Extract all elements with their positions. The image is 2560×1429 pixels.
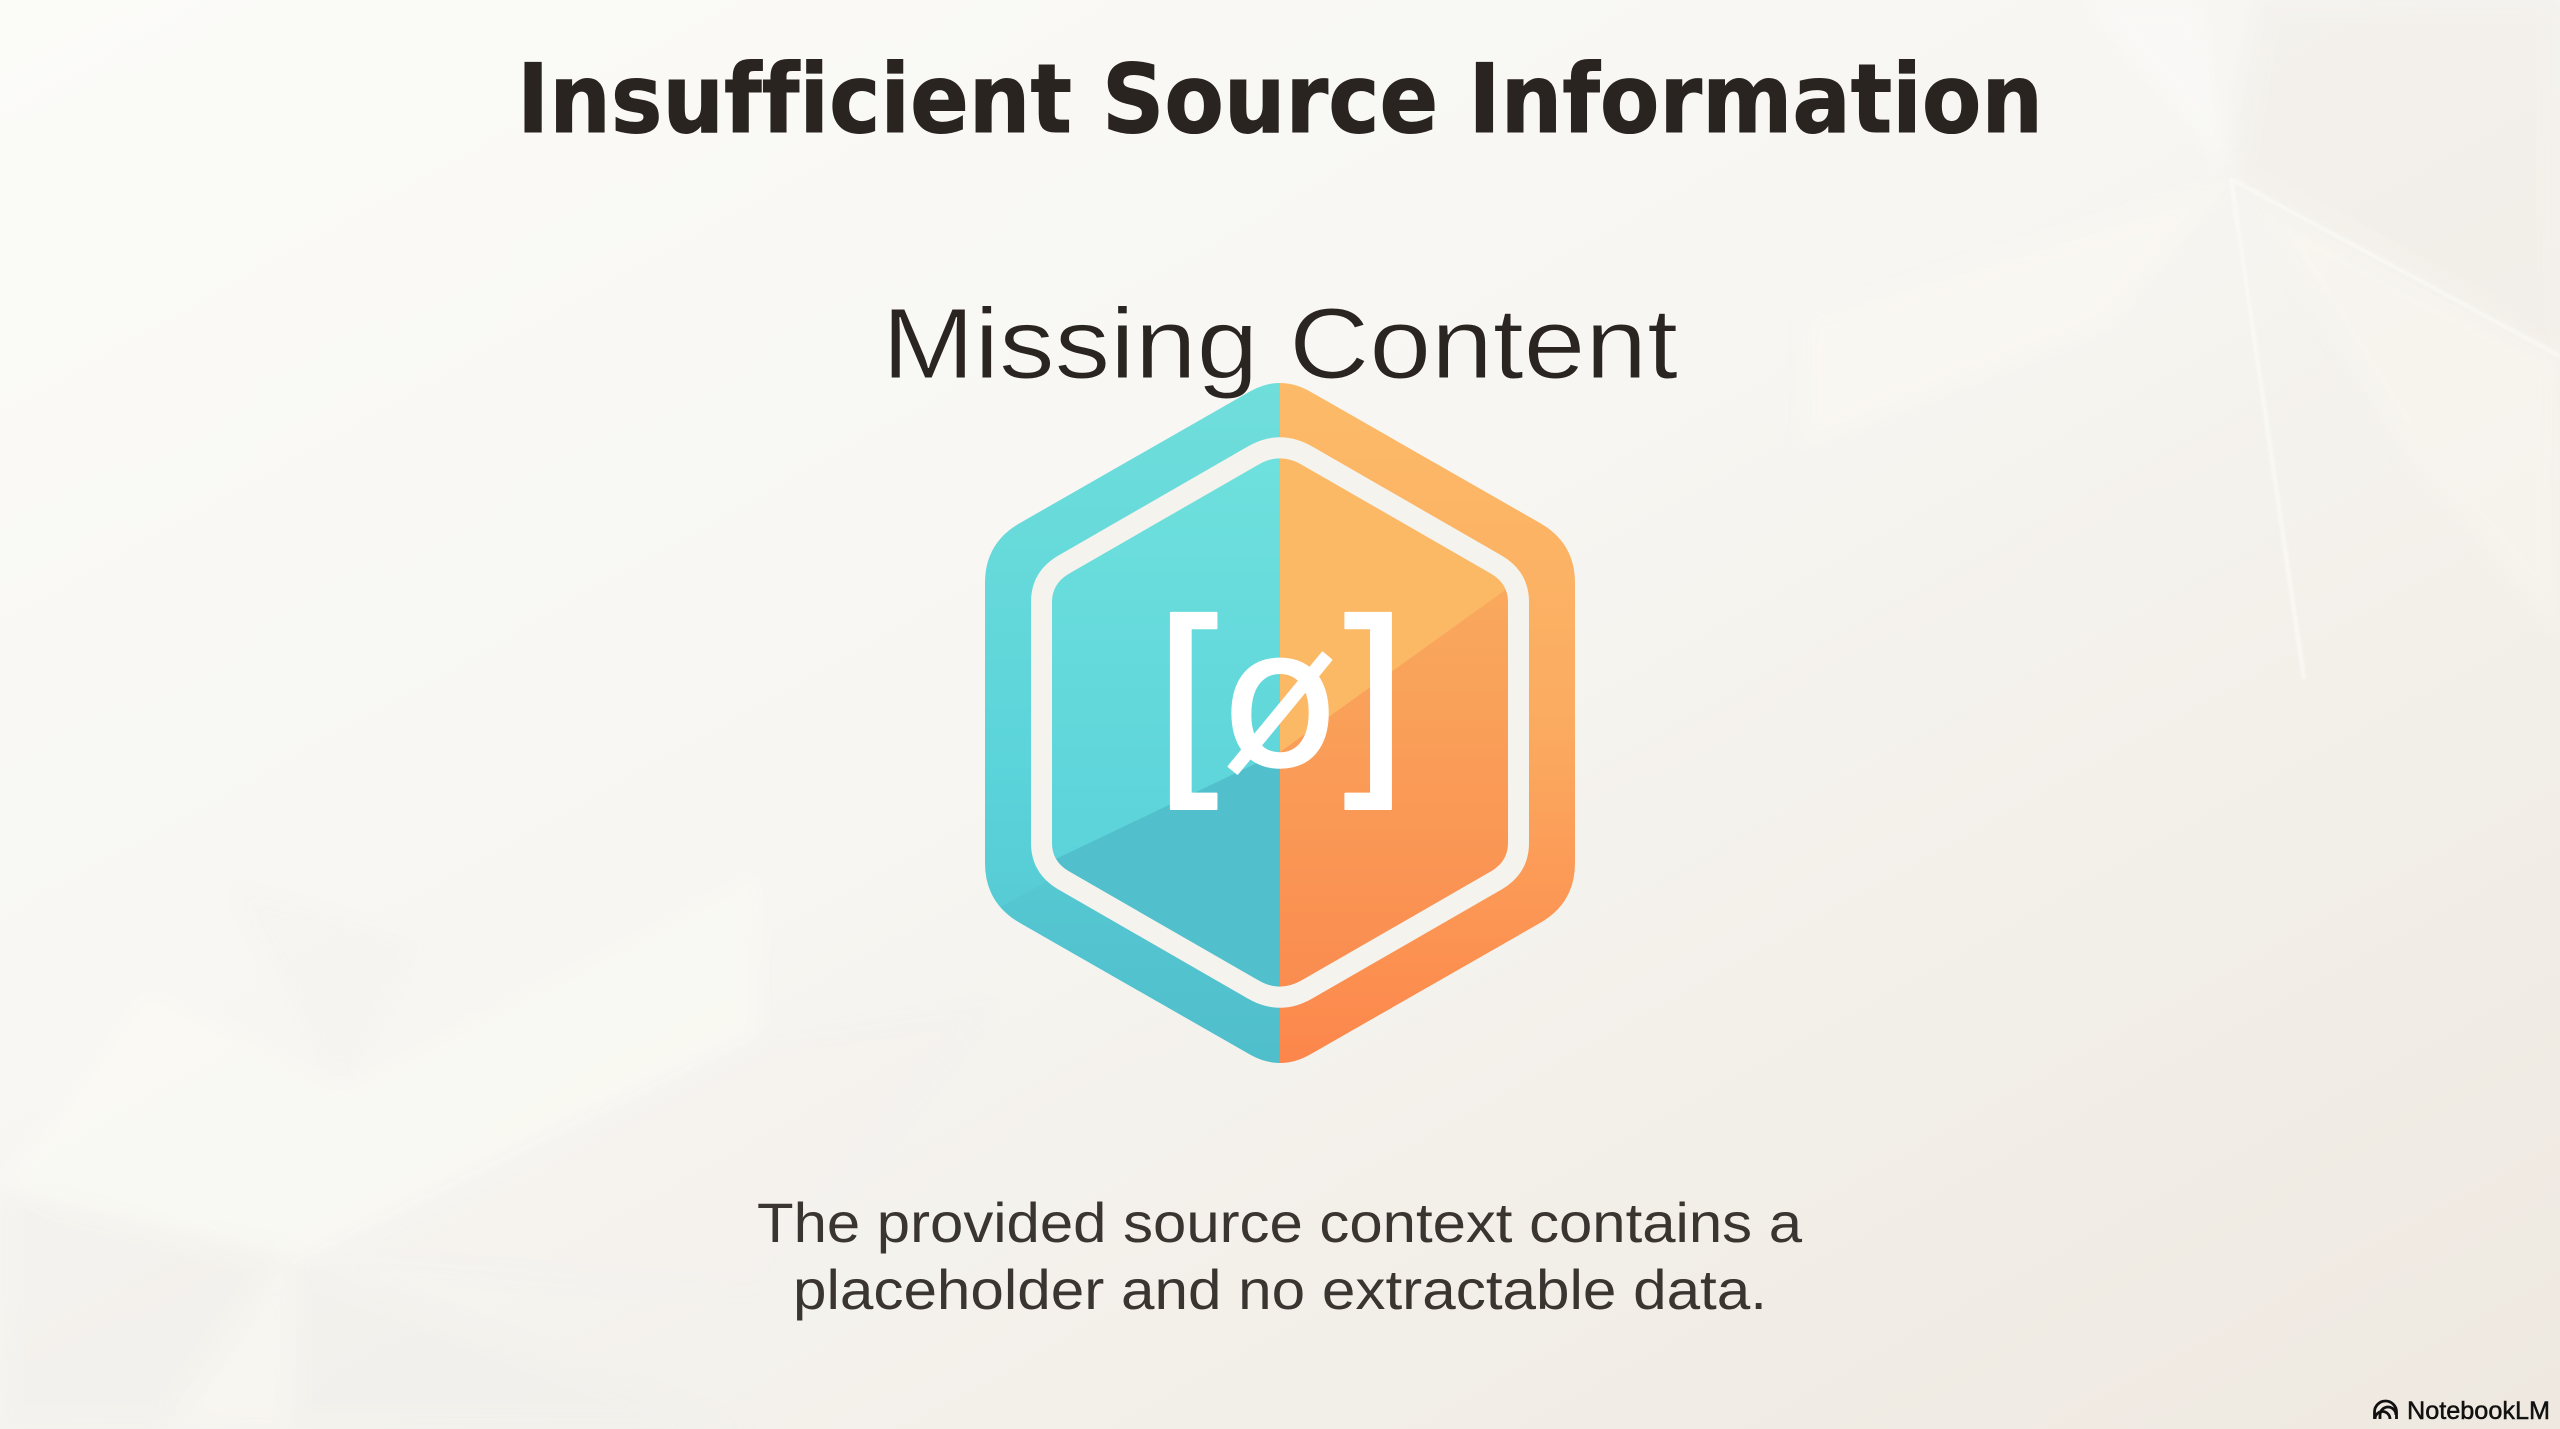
title: Insufficient Source Information: [517, 45, 2043, 155]
body text: placeholder and no extractable data.: [793, 1258, 1767, 1321]
symbol: bracketed empty set: [: [1152, 576, 1238, 832]
inner shaded panels: [1056, 590, 1508, 896]
body text: The provided source context contains a: [757, 1191, 1803, 1254]
icon: notebooklm arcs: [2374, 1401, 2396, 1419]
icon: split hexagon with empty set: [985, 374, 1575, 1072]
heading: missing content: Missing Content: [882, 288, 1678, 400]
symbol: bracketed empty set: [1152, 576, 1410, 832]
white hexagon ring: [1042, 448, 1518, 997]
hexagon outer fill: [985, 374, 1575, 1072]
symbol: bracketed empty set: ]: [1324, 576, 1410, 832]
notebooklm watermark: NotebookLM: [2407, 1397, 2550, 1425]
symbol: bracketed empty set: ø: [1222, 589, 1338, 810]
body text: [757, 1191, 1803, 1321]
